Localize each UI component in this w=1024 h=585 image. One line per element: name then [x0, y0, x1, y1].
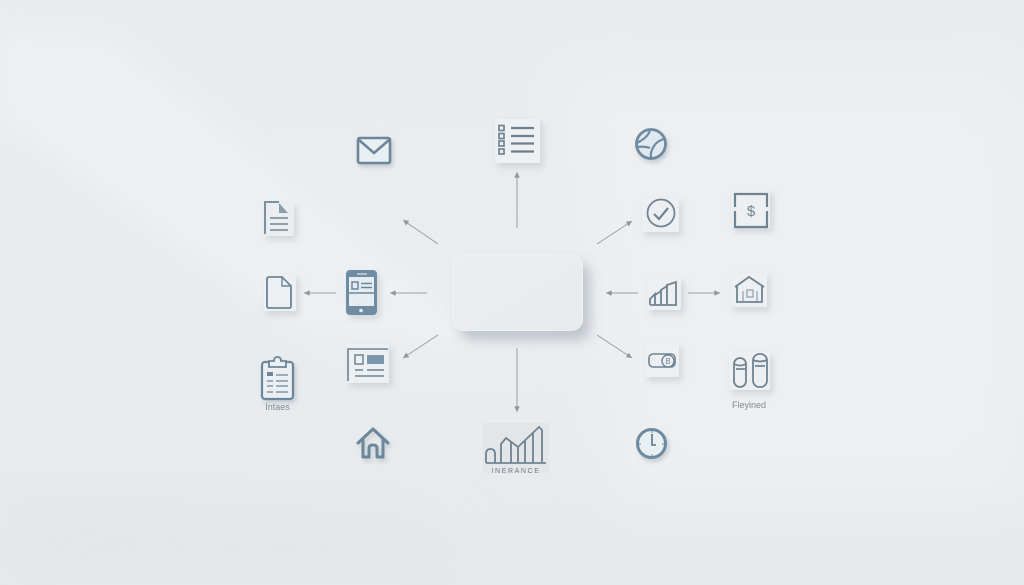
icon: dollar card — [731, 189, 770, 228]
icon: browser card — [347, 344, 389, 383]
icon: house — [358, 429, 388, 457]
icon: toggle badge card — [645, 343, 679, 377]
arrows connecting hub to icons — [304, 172, 720, 412]
central hub box — [452, 254, 583, 331]
icon: toggle badge card: B — [665, 357, 671, 366]
icon: document with lines — [264, 202, 294, 236]
icon: cylinders card with label — [729, 352, 770, 410]
icon: checklist card — [495, 119, 540, 163]
icon: clock — [638, 430, 666, 458]
chart caption: INERANCE — [492, 468, 540, 475]
clipboard label: Intaes — [265, 402, 290, 412]
icon: clipboard with label — [262, 357, 293, 412]
icon: blank document card — [264, 274, 296, 311]
icon: house card — [731, 273, 767, 307]
icon: envelope — [358, 138, 390, 163]
icon: line and bar chart card with caption — [483, 423, 549, 475]
cylinders label: Fleyined — [732, 400, 766, 410]
icon: smartphone — [346, 270, 377, 315]
icon: check circle card — [642, 198, 679, 232]
icon: dollar card: $ — [747, 203, 756, 220]
icon: globe — [636, 130, 666, 158]
icon: bars chart card — [647, 277, 681, 310]
